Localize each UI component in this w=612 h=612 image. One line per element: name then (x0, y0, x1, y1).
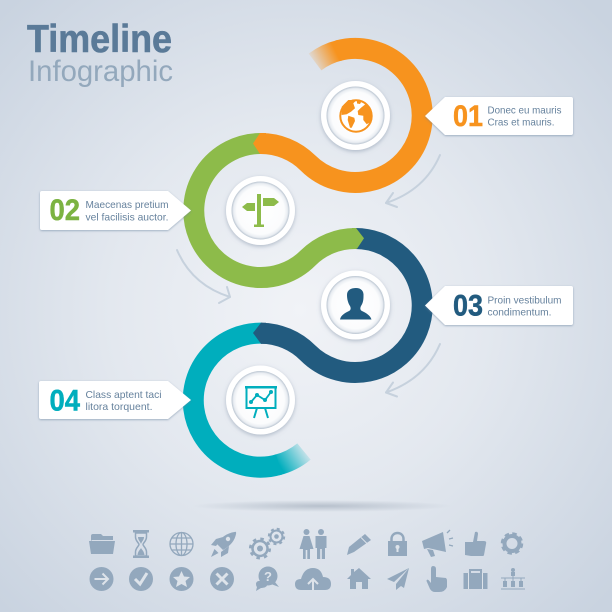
callout: 04 (39, 381, 191, 419)
teal ribbon segment (193, 333, 304, 467)
callout: 01 (425, 97, 573, 135)
arrow: step 2 to 3 (177, 250, 230, 303)
badge: presentation chart (226, 366, 295, 434)
icon: hourglass (133, 530, 149, 558)
callout: 01: 01 (453, 100, 483, 133)
icon: question bubble: ? (264, 569, 272, 584)
icon: globe (340, 100, 372, 132)
icon row: bottom (90, 566, 525, 592)
icon: arrow button (90, 567, 114, 591)
callout: 03: 03 (453, 290, 483, 322)
icon: signpost (242, 194, 279, 227)
navy ribbon segment (253, 238, 422, 372)
green ribbon segment (194, 144, 364, 277)
callout: 04: 04 (50, 384, 80, 418)
icon: thumbs up (465, 532, 486, 556)
icon: paper plane (387, 568, 409, 590)
icon: cross button (210, 567, 234, 591)
icon: question bubble (256, 566, 279, 591)
icon: folder (89, 534, 115, 554)
icon: pencil (347, 534, 371, 555)
badge: globe (321, 81, 390, 150)
icon: person (340, 288, 372, 320)
icon row: top (89, 529, 522, 559)
icon: lock (388, 533, 407, 556)
icon: org chart (501, 568, 525, 589)
icon: star button (170, 567, 194, 591)
callout: 02 (40, 191, 191, 230)
badge: signpost (226, 176, 295, 245)
callout: 02: Maecenas pretium (86, 199, 169, 211)
icon: pointing hand (426, 566, 447, 592)
icon: people (300, 529, 326, 559)
callout: 02: 02 (50, 194, 80, 227)
callout: 03: Proin vestibulum (488, 294, 562, 306)
callout: 01: Donec eu mauris (488, 104, 562, 116)
callout: 04: Class aptent taci (86, 389, 162, 401)
icon: cloud upload (295, 568, 331, 590)
floor shadow (192, 500, 452, 512)
icon: gear (502, 534, 522, 554)
icon: briefcase (464, 570, 488, 589)
orange ribbon segment (253, 48, 422, 182)
icon: presentation chart (245, 386, 277, 418)
badge: person (321, 270, 390, 340)
title (27, 18, 173, 88)
icon: gears (250, 529, 284, 558)
callout: 03: condimentum. (488, 306, 552, 318)
icon: megaphone (422, 530, 453, 557)
icon: rocket (211, 532, 236, 557)
callout: 01: Cras et mauris. (488, 116, 554, 128)
callout: 04: litora torquent. (86, 401, 152, 413)
title: Timeline (27, 18, 172, 61)
arrow: step 1 to 2 (386, 155, 440, 207)
callout: 02: vel facilisis auctor. (86, 212, 168, 224)
arrow: step 3 to 4 (386, 344, 440, 396)
callout: 03 (425, 286, 573, 325)
title: Infographic (28, 55, 173, 88)
icon: check button (129, 567, 153, 591)
icon: wire globe (170, 532, 193, 556)
icon: home (347, 568, 371, 589)
